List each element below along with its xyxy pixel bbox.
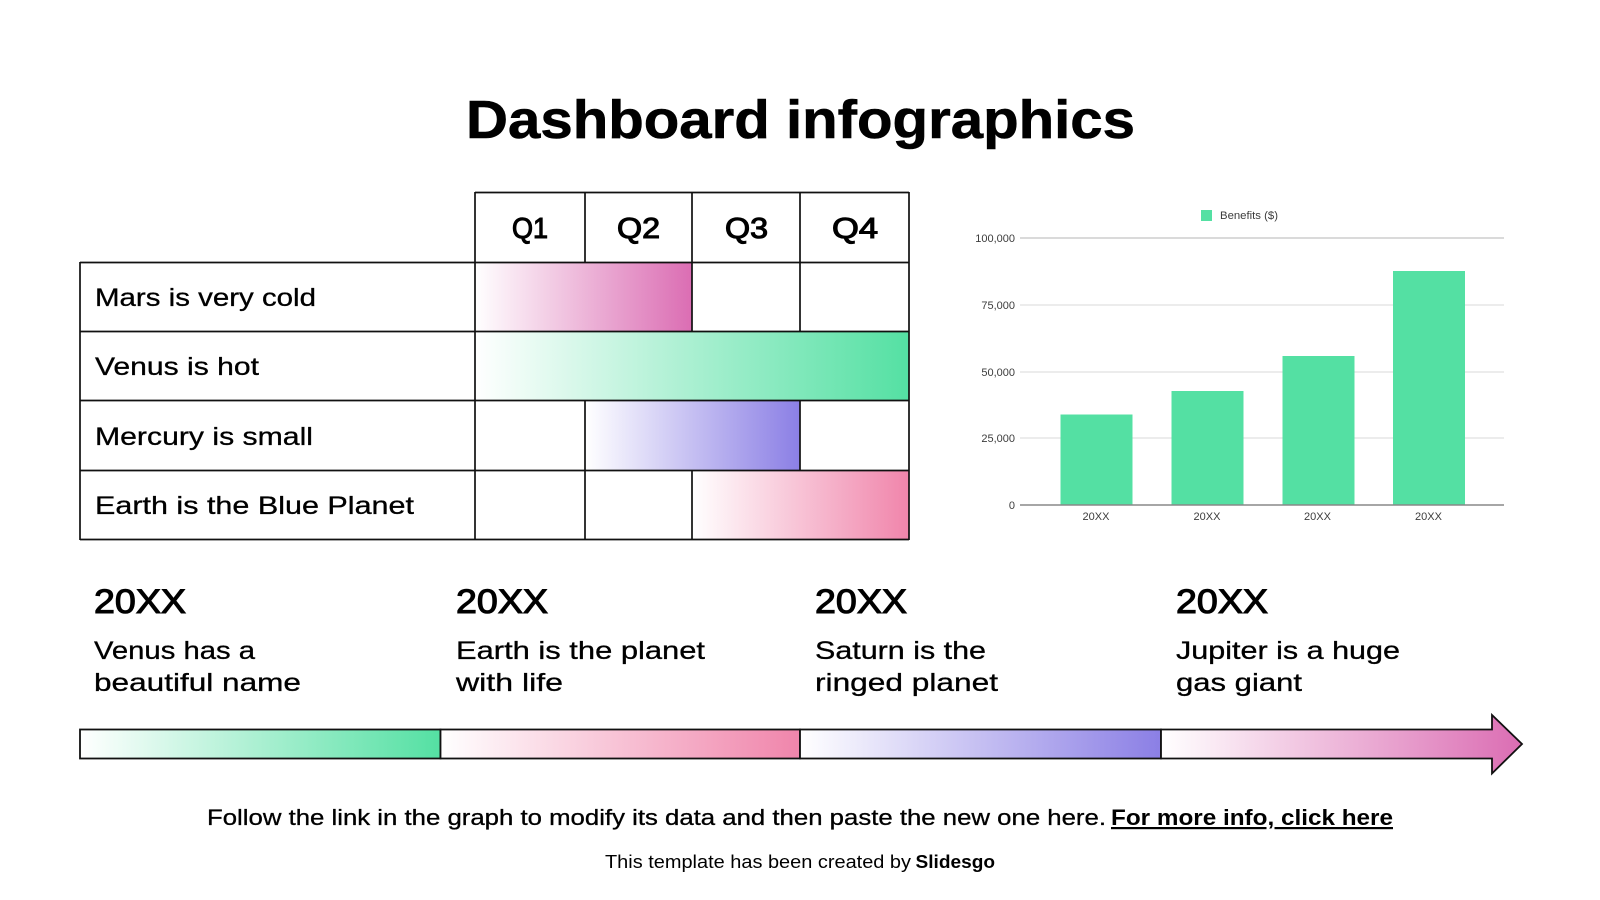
bar chart: Benefits <box>975 210 1504 523</box>
bar: Mars Q1-Q2 <box>475 262 692 331</box>
row labels: Mercury is small <box>95 423 313 451</box>
quarter headings: Q3 <box>725 213 768 245</box>
bars <box>1060 271 1465 505</box>
panel: quarterly schedule table <box>80 192 909 540</box>
quarter headings <box>512 213 878 245</box>
timeline item 2: Earth is the planet <box>456 637 705 665</box>
x axis labels: 20XX <box>1083 511 1110 523</box>
timeline item 1: Venus has a <box>94 637 255 665</box>
timeline arrow <box>80 715 1522 774</box>
timeline item 2: 20XX <box>456 583 548 621</box>
y axis labels: 50,000 <box>981 367 1015 379</box>
y axis labels: 100,000 <box>975 233 1015 245</box>
timeline item 4: 20XX <box>1176 583 1268 621</box>
timeline item 4 <box>1176 583 1400 697</box>
gridlines <box>1020 238 1504 438</box>
arrow segment: green <box>80 730 440 758</box>
arrow segment: pink <box>440 730 800 758</box>
timeline item 2 <box>455 583 705 697</box>
footer note <box>207 805 1393 830</box>
y axis labels: 0 <box>1009 500 1015 512</box>
x axis labels <box>1083 511 1443 523</box>
timeline item 1 <box>94 583 301 697</box>
timeline item 2: with life <box>455 669 563 697</box>
timeline item 4: gas giant <box>1176 669 1302 697</box>
timeline item 1: 20XX <box>94 583 186 621</box>
timeline item 3: Saturn is the <box>815 637 986 665</box>
timeline item 3: ringed planet <box>815 669 998 697</box>
row labels: Venus is hot <box>95 353 259 381</box>
bar: Venus Q1-Q4 <box>475 331 909 400</box>
y axis labels: 75,000 <box>981 300 1015 312</box>
title: Dashboard infographics <box>466 90 1135 150</box>
footer note: Follow the link in the graph to modify its data and then paste the new one here. <box>207 805 1106 830</box>
bar: Earth Q3-Q4 <box>692 470 909 539</box>
arrow segment: magenta head <box>1161 715 1522 774</box>
bar: Mercury Q2-Q3 <box>585 400 800 470</box>
y axis labels: 25,000 <box>981 433 1015 445</box>
credit line: This template has been created by <box>605 852 911 872</box>
row labels <box>95 284 414 520</box>
quarter headings: Q4 <box>832 213 878 245</box>
chart legend: Benefits ($) <box>1220 210 1278 222</box>
timeline item 4: Jupiter is a huge <box>1176 637 1400 665</box>
quarter headings: Q1 <box>512 213 548 245</box>
row labels: Earth is the Blue Planet <box>95 492 414 520</box>
y axis labels <box>975 233 1015 512</box>
timeline item 3 <box>815 583 998 697</box>
x axis line <box>1020 504 1504 506</box>
row labels: Mars is very cold <box>95 284 316 312</box>
quarter headings: Q2 <box>617 213 660 245</box>
arrow segment: purple <box>800 730 1161 758</box>
link text: For more info, click here <box>1111 805 1393 830</box>
x axis labels: 20XX <box>1415 511 1443 523</box>
timeline item 1: beautiful name <box>94 669 301 697</box>
timeline item 3: 20XX <box>815 583 907 621</box>
table grid <box>80 192 909 540</box>
x axis labels: 20XX <box>1194 511 1221 523</box>
x axis labels: 20XX <box>1304 511 1332 523</box>
credit line: Slidesgo <box>916 852 995 872</box>
